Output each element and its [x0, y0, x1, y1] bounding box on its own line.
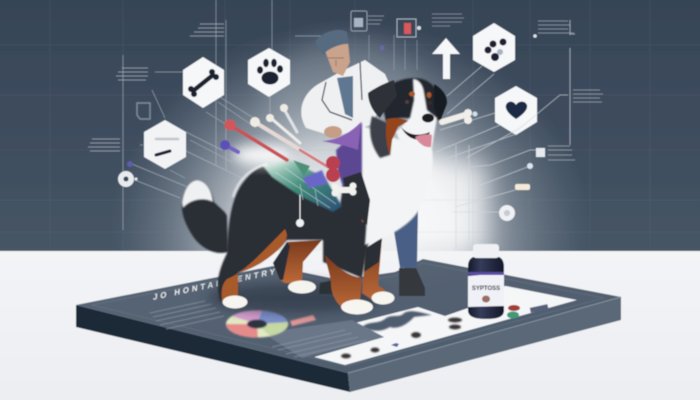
eye spots — [405, 92, 432, 105]
far rear paw — [288, 280, 316, 294]
far rear leg — [273, 240, 322, 283]
right text lines — [538, 21, 603, 160]
hexagon icon: two bones — [144, 120, 186, 169]
face and neck — [324, 42, 350, 76]
tongue — [415, 134, 432, 147]
body — [218, 165, 378, 301]
rear leg tan band — [222, 229, 287, 301]
bone: white back — [258, 124, 330, 168]
far front leg — [362, 238, 392, 301]
bone: white front — [336, 187, 352, 193]
muscle blobs — [303, 170, 328, 188]
tan cheek — [386, 118, 408, 155]
right ear — [434, 84, 447, 122]
text block: grey panel — [263, 320, 384, 358]
cast shadow — [207, 283, 383, 313]
small marker: left card — [137, 103, 150, 119]
thumbnails — [341, 318, 462, 358]
dark neck stripes — [370, 116, 392, 158]
blaze and muzzle — [396, 79, 437, 152]
boots — [399, 268, 425, 296]
hat — [315, 30, 349, 55]
white chest — [359, 125, 433, 245]
platform — [76, 259, 621, 392]
near front leg — [325, 255, 362, 310]
head — [380, 78, 440, 122]
far front paw — [372, 292, 394, 304]
supplement bottle: SYPTOSS — [472, 286, 500, 292]
anatomy fan — [262, 160, 342, 212]
text lines — [150, 301, 366, 357]
bone: red — [230, 125, 287, 160]
lighter cloth top — [322, 122, 361, 150]
trousers — [393, 208, 418, 268]
dog — [182, 78, 447, 314]
supplement bottle — [468, 244, 504, 319]
hexagon icon: paw cluster — [473, 23, 515, 72]
right connector lines and labels — [436, 20, 575, 250]
small marker: round dog badge — [118, 161, 138, 187]
purple cloth — [336, 122, 362, 190]
hand — [324, 126, 342, 138]
platform title: JO HONTAL HENTRY — [153, 267, 276, 302]
bone: right of head — [442, 115, 465, 122]
hexagon icon: heart — [495, 86, 537, 135]
right markers — [499, 34, 545, 221]
hexagon icon: bone — [183, 57, 224, 108]
rear paw — [222, 296, 248, 308]
black back of shoulder — [343, 172, 370, 225]
left connector lines and labels — [123, 0, 340, 230]
arrow up icon — [432, 38, 460, 79]
vet — [301, 30, 425, 296]
coat — [301, 60, 392, 137]
wall background — [0, 0, 700, 251]
tail — [182, 180, 228, 253]
floor — [0, 251, 700, 400]
glow flare — [232, 145, 292, 165]
tail tip — [182, 180, 213, 208]
near front paw — [341, 300, 373, 314]
bone: purple — [225, 145, 238, 152]
pendant marker — [299, 195, 301, 222]
tan chest patch — [358, 205, 367, 222]
top markers — [351, 11, 464, 70]
bones — [220, 104, 478, 227]
map shape — [362, 311, 432, 331]
nose — [422, 114, 434, 122]
hexagon icon: paw — [248, 48, 290, 97]
mouth — [401, 127, 430, 140]
pie chart — [226, 310, 316, 338]
left ear — [368, 80, 397, 118]
stethoscope — [322, 62, 362, 120]
butterfly mark — [391, 343, 399, 347]
left text lines — [88, 24, 224, 151]
white info panel — [314, 286, 577, 365]
pills — [507, 304, 548, 318]
